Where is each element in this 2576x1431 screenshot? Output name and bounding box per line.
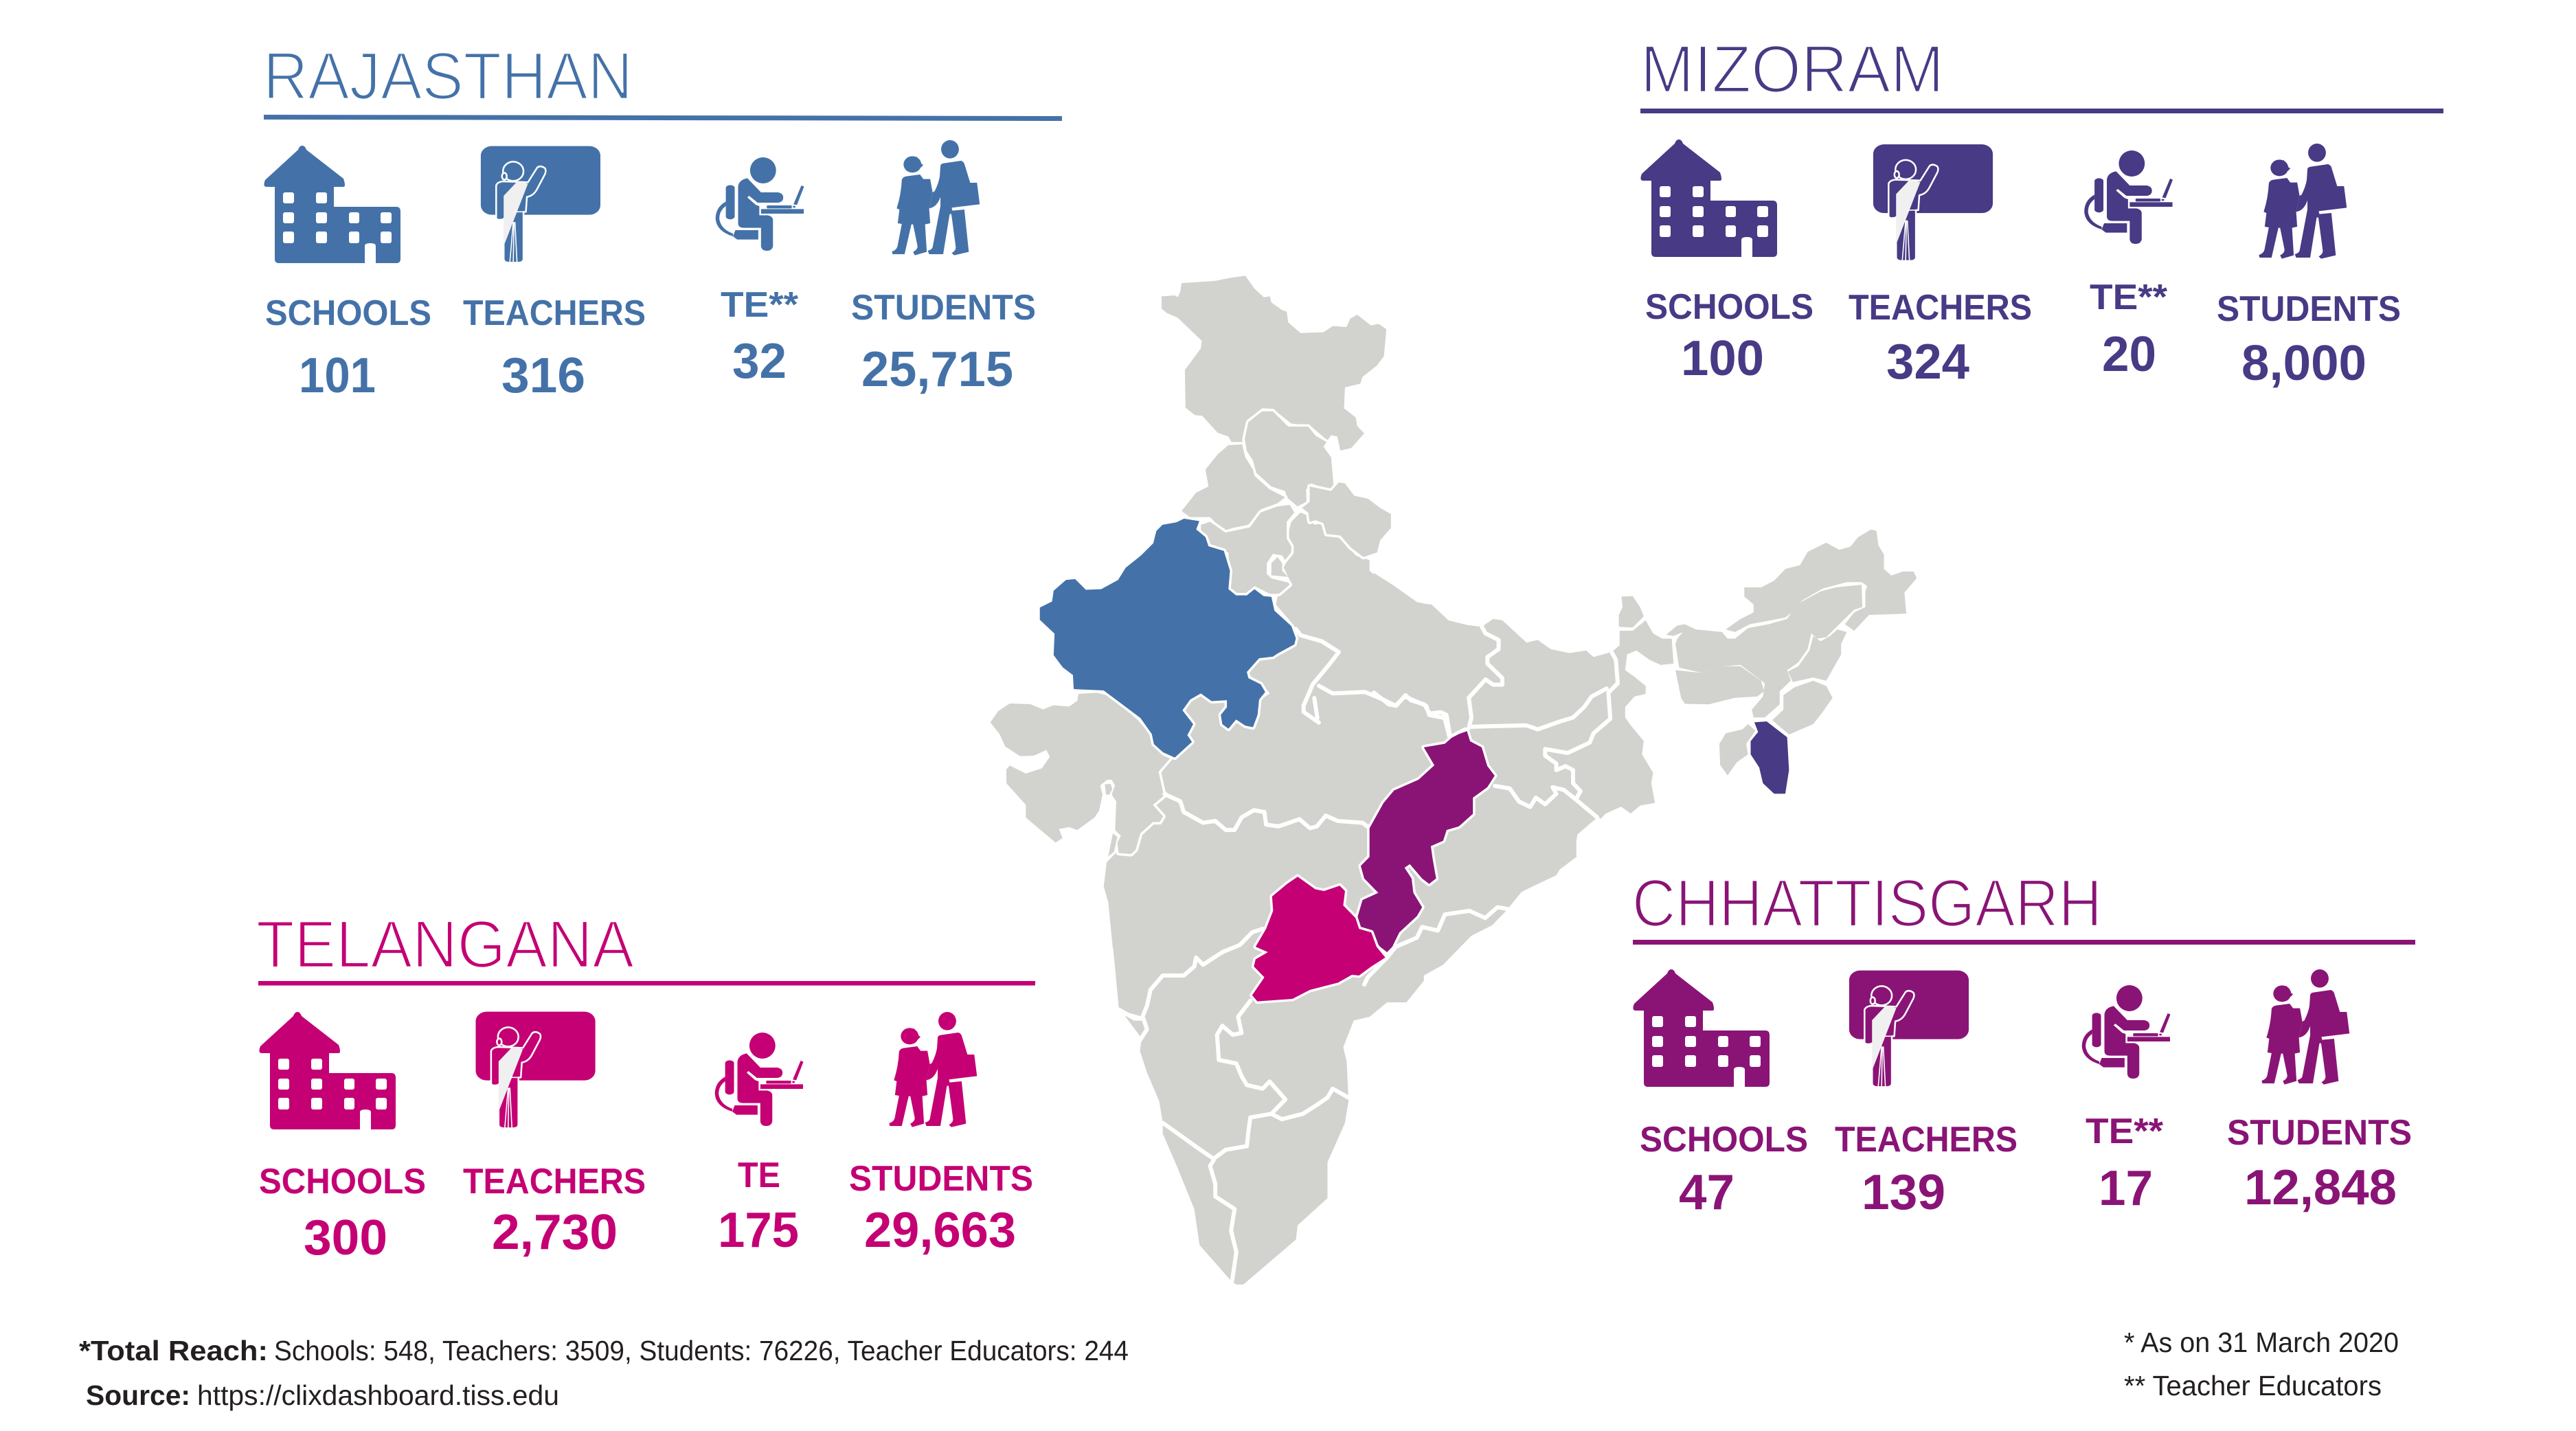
number: TE: 32	[732, 334, 787, 389]
label: students: STUDENTS	[2217, 289, 2401, 329]
label: teachers: TEACHERS	[463, 293, 646, 333]
northern states	[1162, 275, 1451, 742]
label: TE: TE**	[2090, 278, 2168, 317]
map of India	[991, 275, 1917, 1285]
icon: teacher educator	[715, 1033, 804, 1126]
southern state borders	[1119, 794, 1508, 1281]
highlighted state: Chhattisgarh	[1357, 731, 1495, 952]
number: schools: 47	[1679, 1165, 1735, 1220]
label: TE: TE**	[2086, 1112, 2164, 1151]
icon: students	[889, 1012, 977, 1127]
footer: source: Source:	[86, 1379, 190, 1411]
number: students: 12,848	[2244, 1160, 2397, 1215]
icon: teacher	[1849, 971, 1969, 1087]
number: schools: 101	[299, 348, 376, 403]
icon: school	[1633, 969, 1770, 1087]
number: teachers: 2,730	[492, 1205, 618, 1260]
icon: students	[2261, 969, 2349, 1085]
label: teachers: TEACHERS	[1849, 288, 2032, 328]
number: teachers: 324	[1886, 335, 1969, 390]
panel: Chhattisgarh	[1632, 866, 2415, 1220]
panel: Telangana	[256, 907, 1035, 1265]
icon: teacher	[481, 146, 600, 262]
heading: Rajasthan: RAJASTHAN	[263, 38, 633, 113]
label: schools: SCHOOLS	[1640, 1120, 1808, 1160]
number: schools: 300	[304, 1210, 387, 1265]
heading rule	[1640, 109, 2443, 113]
icon: students	[892, 140, 980, 256]
eastern and north-eastern states	[1374, 530, 1917, 818]
footnote: date: * As on 31 March 2020	[2124, 1327, 2399, 1358]
land: central India base	[1104, 512, 1673, 1285]
panel: Rajasthan	[263, 38, 1062, 403]
icon: school	[1640, 139, 1777, 257]
label: schools: SCHOOLS	[1645, 287, 1814, 327]
number: schools: 100	[1681, 331, 1764, 386]
highlighted state: Rajasthan	[1040, 519, 1296, 758]
Gujarat	[991, 692, 1170, 857]
number: teachers: 316	[501, 348, 585, 403]
number: students: 8,000	[2241, 336, 2366, 391]
heading rule	[1633, 940, 2415, 945]
heading rule	[264, 115, 1062, 121]
heading rule	[258, 981, 1035, 985]
label: schools: SCHOOLS	[259, 1162, 426, 1202]
icon: teacher	[475, 1012, 596, 1128]
icon: teacher educator	[2082, 985, 2171, 1079]
number: students: 29,663	[864, 1203, 1016, 1258]
label: students: STUDENTS	[851, 288, 1036, 328]
heading: Chhattisgarh: CHHATTISGARH	[1632, 866, 2102, 940]
number: TE: 17	[2099, 1161, 2153, 1216]
number: TE: 175	[718, 1203, 799, 1258]
footer: total reach: Schools: 548, Teachers: 3509, Students: 76226, Teacher Educators: 244	[274, 1335, 1129, 1366]
label: students: STUDENTS	[849, 1159, 1033, 1199]
label: TE: TE**	[721, 285, 799, 325]
panel: Mizoram	[1640, 32, 2443, 391]
heading: Mizoram: MIZORAM	[1640, 32, 1944, 106]
icon: teacher	[1873, 144, 1993, 261]
label: TE: TE	[738, 1156, 780, 1195]
footer: total reach: *Total Reach:	[79, 1335, 268, 1366]
footnote: teacher educators: ** Teacher Educators	[2124, 1370, 2382, 1401]
number: TE: 20	[2102, 327, 2156, 382]
label: teachers: TEACHERS	[463, 1162, 646, 1202]
icon: teacher educator	[2084, 150, 2173, 244]
highlighted state: Mizoram	[1751, 721, 1789, 793]
icon: school	[259, 1012, 396, 1129]
label: teachers: TEACHERS	[1835, 1120, 2018, 1160]
number: teachers: 139	[1862, 1165, 1945, 1220]
highlighted state: Telangana	[1252, 877, 1386, 1002]
icon: students	[2259, 144, 2347, 259]
label: schools: SCHOOLS	[265, 293, 431, 333]
footer: source: https://clixdashboard.tiss.edu	[197, 1379, 559, 1411]
number: students: 25,715	[861, 342, 1013, 397]
icon: teacher educator	[716, 157, 804, 251]
icon: school	[264, 146, 400, 263]
heading: Telangana: TELANGANA	[256, 907, 634, 982]
label: students: STUDENTS	[2227, 1113, 2412, 1153]
